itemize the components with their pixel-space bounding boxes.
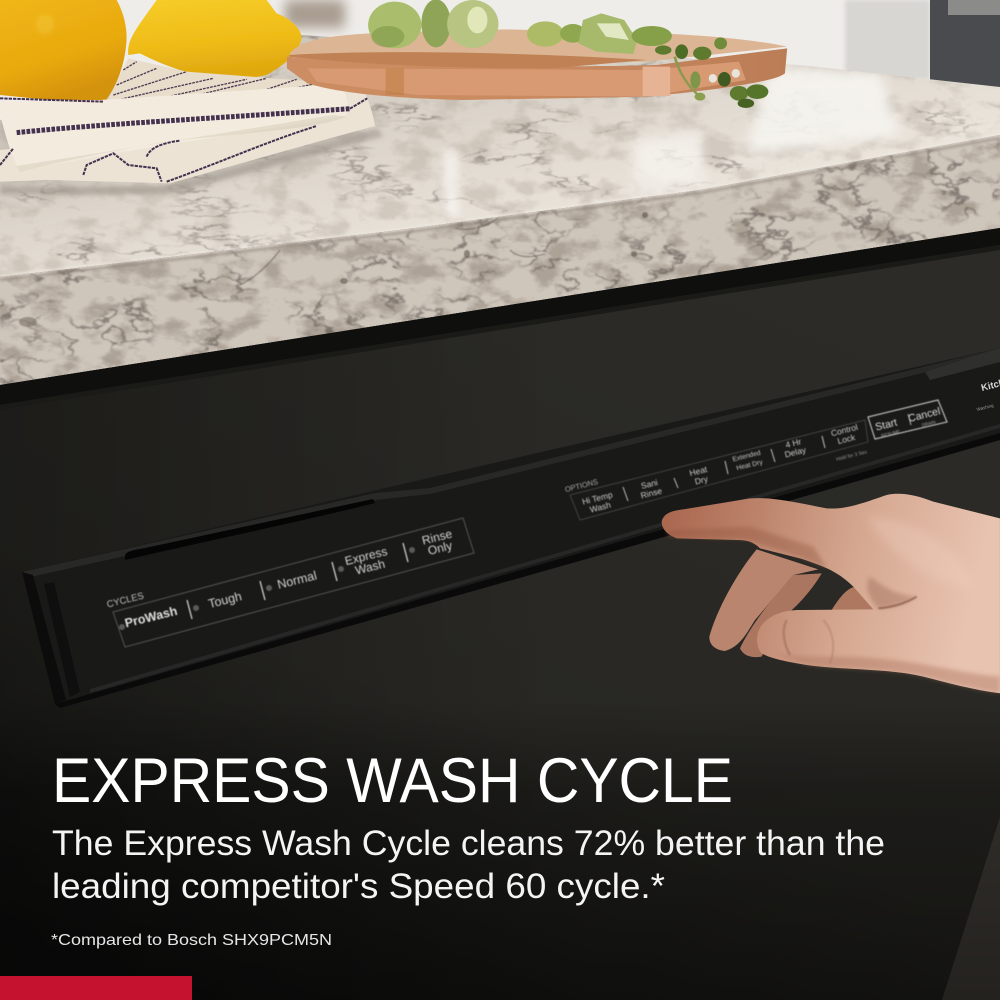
options group: Control [830, 422, 859, 438]
background: blurred kitchen wall [0, 0, 1000, 130]
start and cancel buttons [868, 400, 947, 439]
options group: Heat Dry [736, 459, 764, 472]
cycles group: Wash [354, 557, 386, 578]
options group: Extended [732, 450, 762, 463]
body text: leading competitor's Speed 60 cycle.* [52, 867, 665, 906]
options group: Hi Temp [581, 489, 614, 507]
cutting board with sprouts and herbs [287, 0, 787, 108]
palm, back of hand and index finger [662, 494, 1000, 693]
bottom dark gradient [0, 700, 1000, 1000]
countertop: front edge [0, 120, 1000, 390]
cycles group: Express [343, 544, 389, 568]
towel stripes behind [110, 62, 320, 103]
towel stripes front [17, 109, 350, 133]
options group: Hold for 3 Sec [836, 449, 868, 463]
cycles group: ProWash [123, 604, 179, 630]
towel upper fold [0, 84, 348, 172]
lemon front [0, 0, 127, 100]
hand shading [667, 517, 1000, 693]
board top [289, 29, 787, 62]
footnote: *Compared to Bosch SHX9PCM5N [51, 932, 332, 949]
cycles group: Only [426, 538, 454, 558]
body text [52, 824, 885, 906]
cycles group: CYCLES [106, 591, 145, 611]
options group: Heat [688, 464, 709, 478]
options group: 4 Hr [784, 436, 802, 450]
hand pressing control [662, 494, 1000, 693]
herb sprig [655, 37, 768, 108]
towel shadow on counter [0, 128, 383, 195]
options group: Dry [694, 473, 710, 487]
options group: Lock [836, 432, 857, 446]
third finger [740, 573, 822, 657]
red accent bar [0, 976, 192, 1000]
options group [564, 420, 868, 520]
dishwasher door [0, 228, 1000, 1000]
back finger [832, 587, 880, 610]
cycles group [106, 518, 474, 647]
options group: Rinse [640, 486, 663, 501]
control panel [22, 348, 1000, 708]
brussels sprouts [368, 0, 672, 54]
middle finger [709, 549, 818, 651]
towel lower fold [0, 88, 375, 183]
polished edge highlight [0, 134, 1000, 276]
title: EXPRESS WASH CYCLE [52, 746, 733, 816]
top slot [125, 499, 375, 560]
countertop: polished surface [0, 35, 1000, 277]
lemon behind [128, 0, 302, 78]
brand and status [976, 380, 1000, 411]
towel back layer [107, 58, 375, 133]
options group: Delay [784, 444, 808, 460]
board rim [287, 48, 787, 100]
cycles group: Normal [276, 568, 318, 592]
start and cancel buttons: DRAIN [921, 419, 936, 428]
start and cancel buttons: RESUME [881, 429, 901, 438]
options group: Sani [640, 477, 659, 491]
cycles group: Rinse [420, 527, 454, 548]
options group: OPTIONS [564, 477, 599, 494]
brand and status: Washing [976, 403, 995, 412]
body text: The Express Wash Cycle cleans 72% better than the [52, 824, 885, 863]
options group: Wash [589, 500, 612, 515]
start and cancel buttons: Start [874, 417, 899, 434]
lemons, towel group [0, 0, 383, 195]
start and cancel buttons: Cancel [907, 405, 942, 425]
cycles group: Tough [207, 589, 243, 611]
